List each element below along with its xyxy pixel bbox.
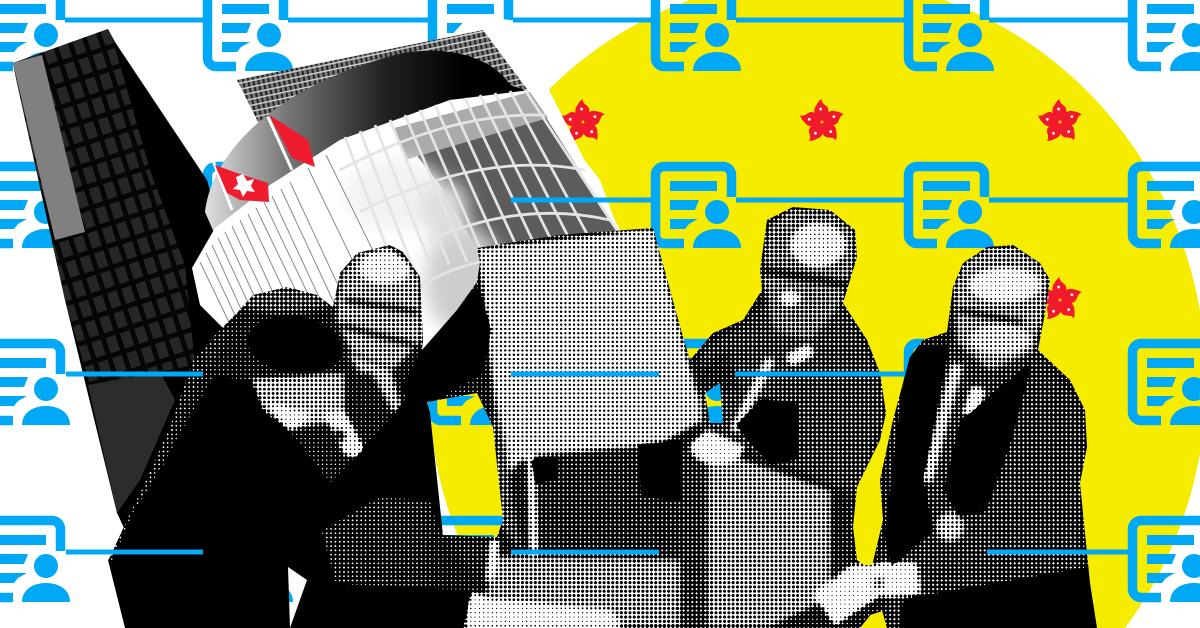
facade	[192, 90, 620, 370]
office tower	[13, 29, 240, 540]
man 2 face	[335, 245, 423, 370]
foreground blue connector lines	[66, 198, 1128, 554]
flag flower	[233, 174, 255, 197]
yellow circle	[428, 0, 1200, 628]
halftone figures	[108, 207, 1097, 628]
Legislative Council building	[192, 51, 620, 370]
man 3 head	[760, 207, 857, 340]
facade ribs	[340, 90, 620, 300]
box lower	[470, 555, 682, 628]
glass interior	[395, 92, 620, 255]
hands	[815, 565, 918, 625]
second box	[680, 440, 832, 628]
box upper	[477, 228, 705, 475]
China flag	[269, 115, 315, 167]
white cut-out behind parliament	[300, 15, 625, 255]
left figure: hair, shoulder	[233, 282, 337, 314]
halftone screen	[108, 207, 1097, 628]
backdrop building	[237, 30, 530, 130]
bauhinia flowers	[557, 97, 1087, 325]
Hong Kong flag	[215, 165, 269, 202]
box dark interior	[530, 442, 682, 562]
solid black areas	[112, 288, 1097, 628]
man 3 suit	[700, 300, 886, 490]
dome	[205, 51, 530, 235]
lower mid dither	[485, 316, 521, 488]
man 4 head	[953, 245, 1050, 370]
flag poles	[212, 117, 292, 210]
man 4 suit	[880, 340, 1097, 628]
